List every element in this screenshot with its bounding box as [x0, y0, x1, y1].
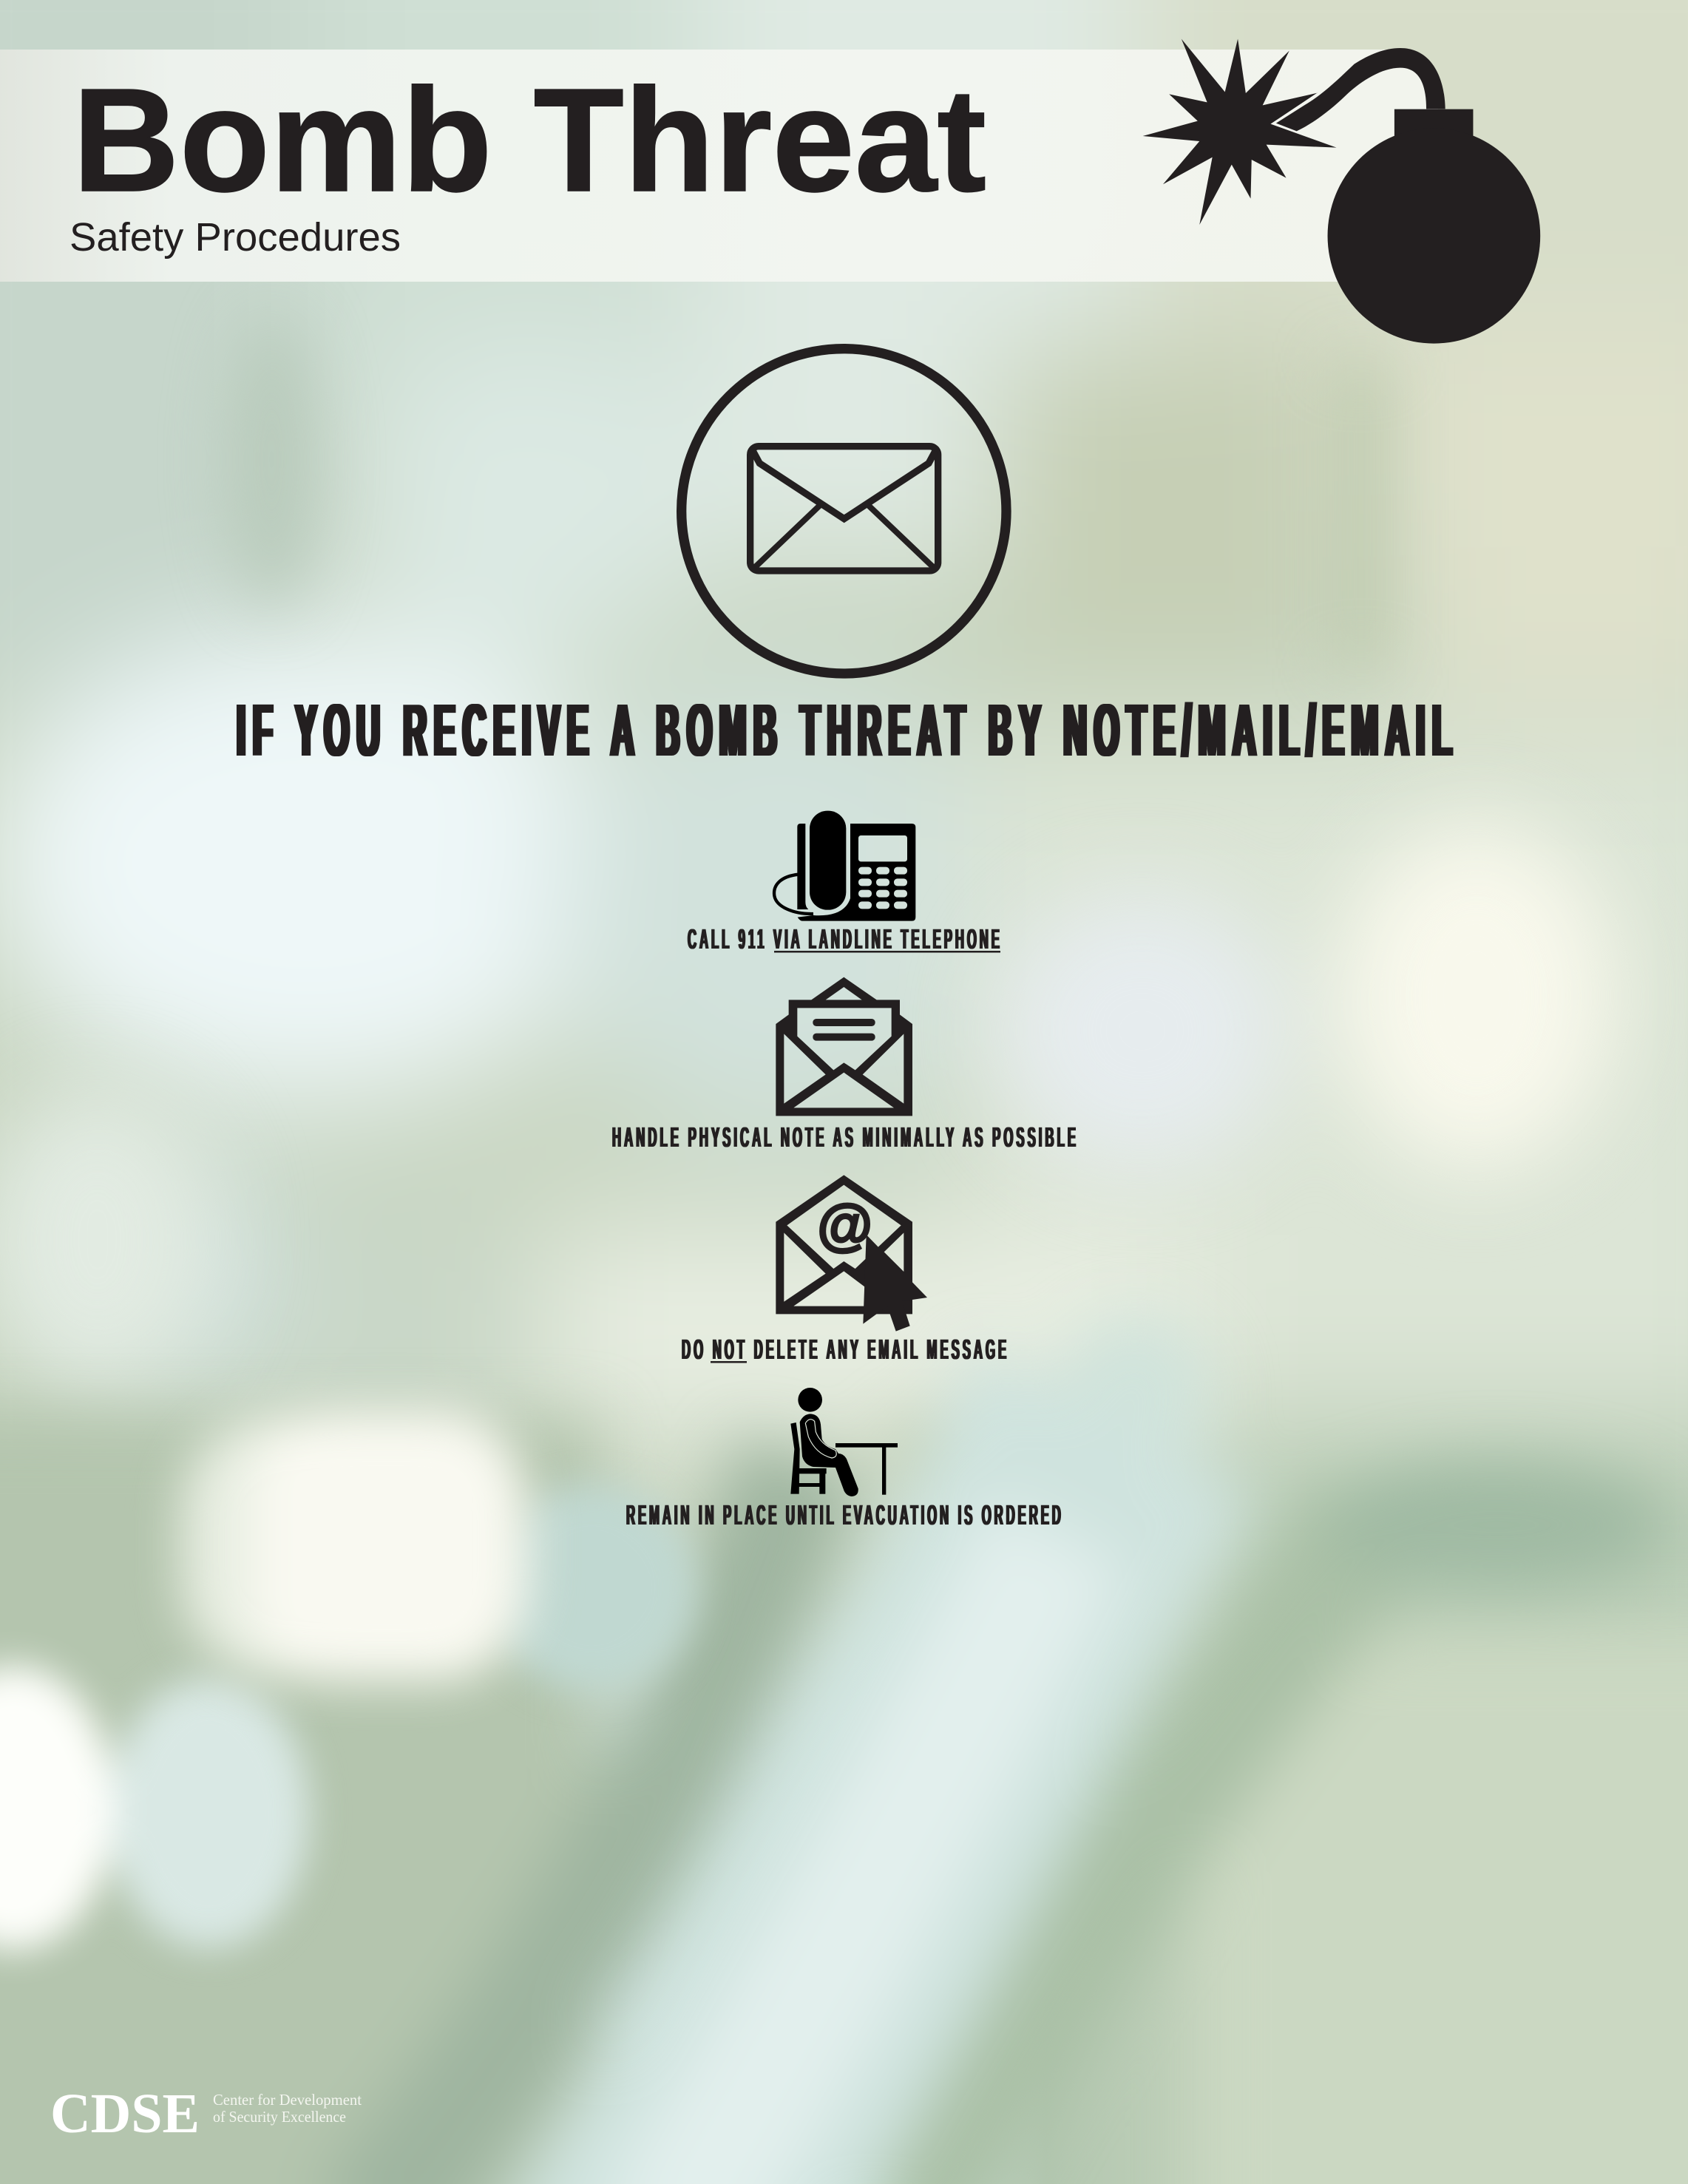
step 1 label: CALL 911 VIA LANDLINE TELEPHONE: [688, 923, 1000, 955]
subtitle: Safety Procedures: [70, 215, 401, 260]
CDSE logo: Center for Development: [213, 2091, 362, 2109]
icon: person seated at desk: [790, 1388, 898, 1496]
title: Bomb Threat: [72, 58, 986, 223]
CDSE logo: CDSE: [50, 2083, 200, 2145]
step 3 label: DO NOT DELETE ANY EMAIL MESSAGE: [682, 1334, 1006, 1366]
step 2 label: HANDLE PHYSICAL NOTE AS MINIMALLY AS POSSIBLE: [612, 1122, 1076, 1153]
step 4 label: REMAIN IN PLACE UNTIL EVACUATION IS ORDERED: [626, 1499, 1061, 1531]
icon: email envelope with cursor: [776, 1175, 927, 1332]
CDSE logo: [50, 2083, 362, 2145]
icon: open envelope with letter: [776, 977, 912, 1116]
icon: desk telephone: [774, 811, 915, 921]
header banner: [0, 50, 1438, 282]
CDSE logo: of Security Excellence: [213, 2108, 346, 2126]
icon: envelope in circle: [682, 349, 1006, 674]
icon: bomb with fuse and spark: [1143, 39, 1540, 344]
main heading: IF YOU RECEIVE A BOMB THREAT BY NOTE/MAIL/EMAIL: [237, 690, 1452, 772]
icon: email envelope with cursor: @: [816, 1195, 872, 1258]
